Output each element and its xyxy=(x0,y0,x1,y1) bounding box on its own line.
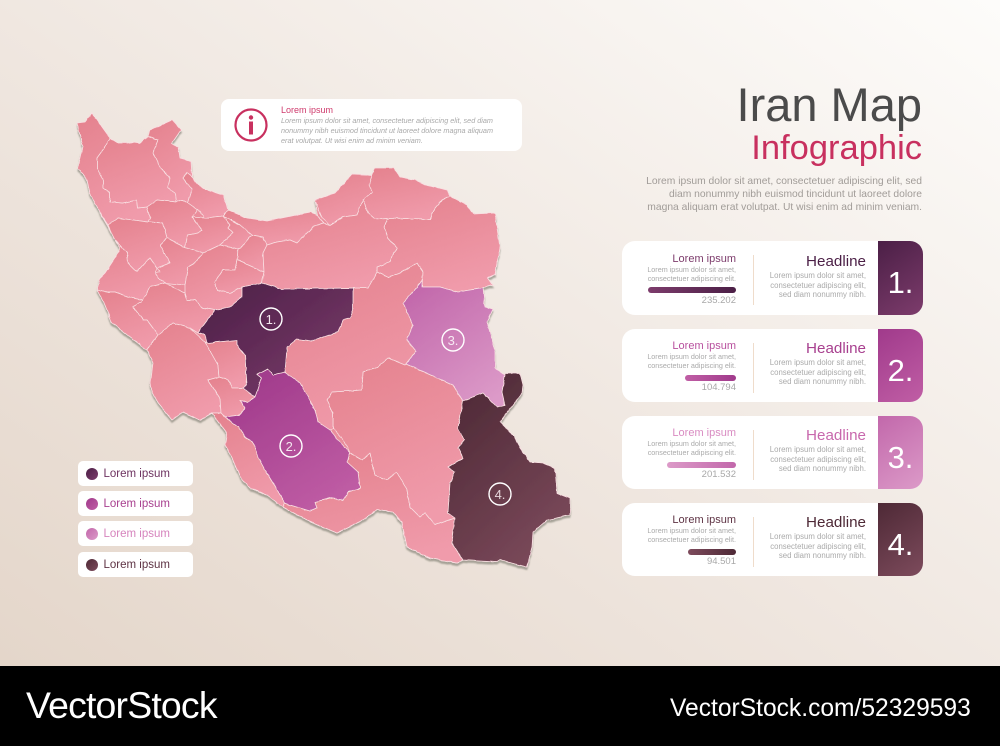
callout text: erat volutpat. Ut wisi enim ad minim veniam. xyxy=(281,136,423,144)
card 4 number xyxy=(878,503,923,576)
callout heading: Lorem ipsum xyxy=(281,104,333,114)
region 1: Isfahan xyxy=(198,283,353,397)
card 2 stat heading: Lorem ipsum xyxy=(672,340,736,352)
card 3 headline: Headline xyxy=(806,427,866,444)
province: Tehran xyxy=(237,235,267,272)
card 3 value: 201.532 xyxy=(702,469,736,480)
card 4 number: 4. xyxy=(888,527,913,562)
marker 3: 3. xyxy=(448,333,458,348)
intro text: diam nonummy nibh euismod tincidunt ut laoreet dolore xyxy=(669,189,922,200)
card 3 stat heading: Lorem ipsum xyxy=(672,427,736,439)
region 2: Fars xyxy=(225,369,360,511)
region 3: South Khorasan xyxy=(403,281,505,407)
card 3 number: 3. xyxy=(888,440,913,475)
card 4 stat text xyxy=(647,526,736,544)
intro text: magna aliquam erat volutpat. Ut wisi enim ad minim veniam. xyxy=(647,202,922,213)
info callout xyxy=(221,99,522,151)
province: Qom xyxy=(215,260,264,293)
card 3 stat text xyxy=(647,439,736,457)
card 1 text: Lorem ipsum dolor sit amet, xyxy=(770,271,866,280)
footer bar xyxy=(0,666,1000,746)
card 4 value: 94.501 xyxy=(707,556,736,567)
province: Khuzestan xyxy=(147,323,221,420)
card 4 stat heading: Lorem ipsum xyxy=(672,514,736,526)
card 1 headline: Headline xyxy=(806,252,866,270)
card 1 xyxy=(622,241,923,315)
marker 4 xyxy=(489,483,511,505)
province: Qazvin xyxy=(185,216,233,253)
marker 2 xyxy=(280,435,302,457)
legend item 4 xyxy=(78,552,193,577)
province: Golestan xyxy=(315,174,373,225)
card 2 number xyxy=(878,329,923,402)
province: Gilan xyxy=(183,173,228,218)
card 3 text xyxy=(770,445,866,473)
card 4 text xyxy=(770,532,866,560)
card 2 bar xyxy=(685,375,736,381)
province: Kerman xyxy=(327,358,464,525)
marker 1: 1. xyxy=(266,312,276,327)
card 3 text: Lorem ipsum dolor sit amet, xyxy=(770,445,866,454)
marker 4: 4. xyxy=(495,487,505,502)
footer id: VectorStock.com/52329593 xyxy=(670,695,971,722)
province: North Khorasan xyxy=(363,168,450,219)
card 1 number: 1. xyxy=(888,265,913,300)
card 3 bar xyxy=(667,462,736,468)
card 3 stat text: Lorem ipsum dolor sit amet, xyxy=(647,439,736,448)
province: Hormozgan xyxy=(283,453,463,563)
province: Lorestan xyxy=(133,283,215,335)
card 1 text: consectetuer adipiscing elit, xyxy=(770,280,866,290)
callout text xyxy=(281,116,493,144)
card 2 xyxy=(622,329,923,402)
province: Kurdistan xyxy=(108,218,170,272)
card 4 text: consectetuer adipiscing elit, xyxy=(770,542,866,550)
province: Kohgiluyeh xyxy=(208,377,255,417)
legend item 3 xyxy=(78,521,193,546)
card 3 stat text: consectetuer adipiscing elit. xyxy=(648,448,736,457)
province: Razavi Khorasan xyxy=(377,196,500,292)
marker 2: 2. xyxy=(286,439,296,454)
card 3 number xyxy=(878,416,923,489)
province: Chaharmahal xyxy=(205,340,247,388)
legend item 2: Lorem ipsum xyxy=(104,498,170,510)
card 2 stat text xyxy=(647,352,736,370)
province: Hamedan xyxy=(155,238,203,285)
card 3 text: consectetuer adipiscing elit, xyxy=(770,454,866,464)
card 1 stat text xyxy=(647,264,736,282)
card 2 stat text: Lorem ipsum dolor sit amet, xyxy=(647,352,736,361)
province: East Azerbaijan xyxy=(97,136,176,208)
card 1 stat text: Lorem ipsum dolor sit amet, xyxy=(647,264,736,274)
card 2 text: sed diam nonummy nibh. xyxy=(779,377,866,386)
province: Ilam xyxy=(97,290,158,350)
card 4 text: Lorem ipsum dolor sit amet, xyxy=(770,532,866,541)
intro text: Lorem ipsum dolor sit amet, consectetuer adipiscing elit, sed xyxy=(646,176,922,187)
province: Kermanshah xyxy=(97,240,165,300)
province: Bushehr xyxy=(212,413,285,507)
intro text xyxy=(646,176,922,213)
card 4 stat text: consectetuer adipiscing elit. xyxy=(648,535,736,544)
marker 1 xyxy=(260,308,282,330)
card 2 stat text: consectetuer adipiscing elit. xyxy=(648,361,736,370)
card 1 bar xyxy=(648,287,736,293)
title: Iran Map xyxy=(737,78,922,131)
marker 3 xyxy=(442,329,464,351)
legend item 2 xyxy=(78,491,193,516)
card 4 text: sed diam nonummy nibh. xyxy=(779,551,866,560)
card 2 text: Lorem ipsum dolor sit amet, xyxy=(770,358,866,367)
card 2 value: 104.794 xyxy=(702,382,736,393)
callout text: Lorem ipsum dolor sit amet, consectetuer adipiscing elit, sed diam xyxy=(281,116,493,124)
card 1 stat text: consectetuer adipiscing elit. xyxy=(648,274,736,282)
callout text: nonummy nibh euismod tincidunt ut laoreet dolore magna aliquam xyxy=(281,126,493,134)
province: Mazandaran xyxy=(223,210,323,245)
province: West Azerbaijan xyxy=(77,113,150,225)
country silhouette xyxy=(77,113,570,567)
card 2 text xyxy=(770,358,866,386)
card 4 headline: Headline xyxy=(806,514,866,531)
card 1 stat heading: Lorem ipsum xyxy=(672,253,736,265)
province: Markazi xyxy=(185,245,242,310)
card 4 xyxy=(622,503,923,576)
province: Alborz xyxy=(220,216,252,249)
card 1 text xyxy=(770,271,866,299)
subtitle: Infographic xyxy=(751,129,922,167)
region 4: Sistan and Baluchestan xyxy=(448,373,570,567)
legend item 1 xyxy=(78,461,193,486)
legend item 4: Lorem ipsum xyxy=(104,558,170,570)
card 4 stat text: Lorem ipsum dolor sit amet, xyxy=(647,526,736,535)
card 3 xyxy=(622,416,923,489)
province: Semnan xyxy=(262,200,397,289)
footer logo: VectorStock xyxy=(26,684,217,726)
card 4 bar xyxy=(688,549,736,555)
card 3 text: sed diam nonummy nibh. xyxy=(779,464,866,473)
legend item 1: Lorem ipsum xyxy=(104,468,170,480)
card 2 text: consectetuer adipiscing elit, xyxy=(770,368,866,376)
legend item 3: Lorem ipsum xyxy=(104,528,170,540)
province: Yazd xyxy=(285,263,423,430)
card 1 number xyxy=(878,241,923,315)
icon: info xyxy=(234,108,268,142)
card 2 headline: Headline xyxy=(806,340,866,357)
province: Zanjan xyxy=(147,200,202,247)
card 2 number: 2. xyxy=(888,353,913,388)
card 1 text: sed diam nonummy nibh. xyxy=(779,290,866,299)
card 1 value: 235.202 xyxy=(702,294,736,306)
province: Ardabil xyxy=(148,120,192,203)
